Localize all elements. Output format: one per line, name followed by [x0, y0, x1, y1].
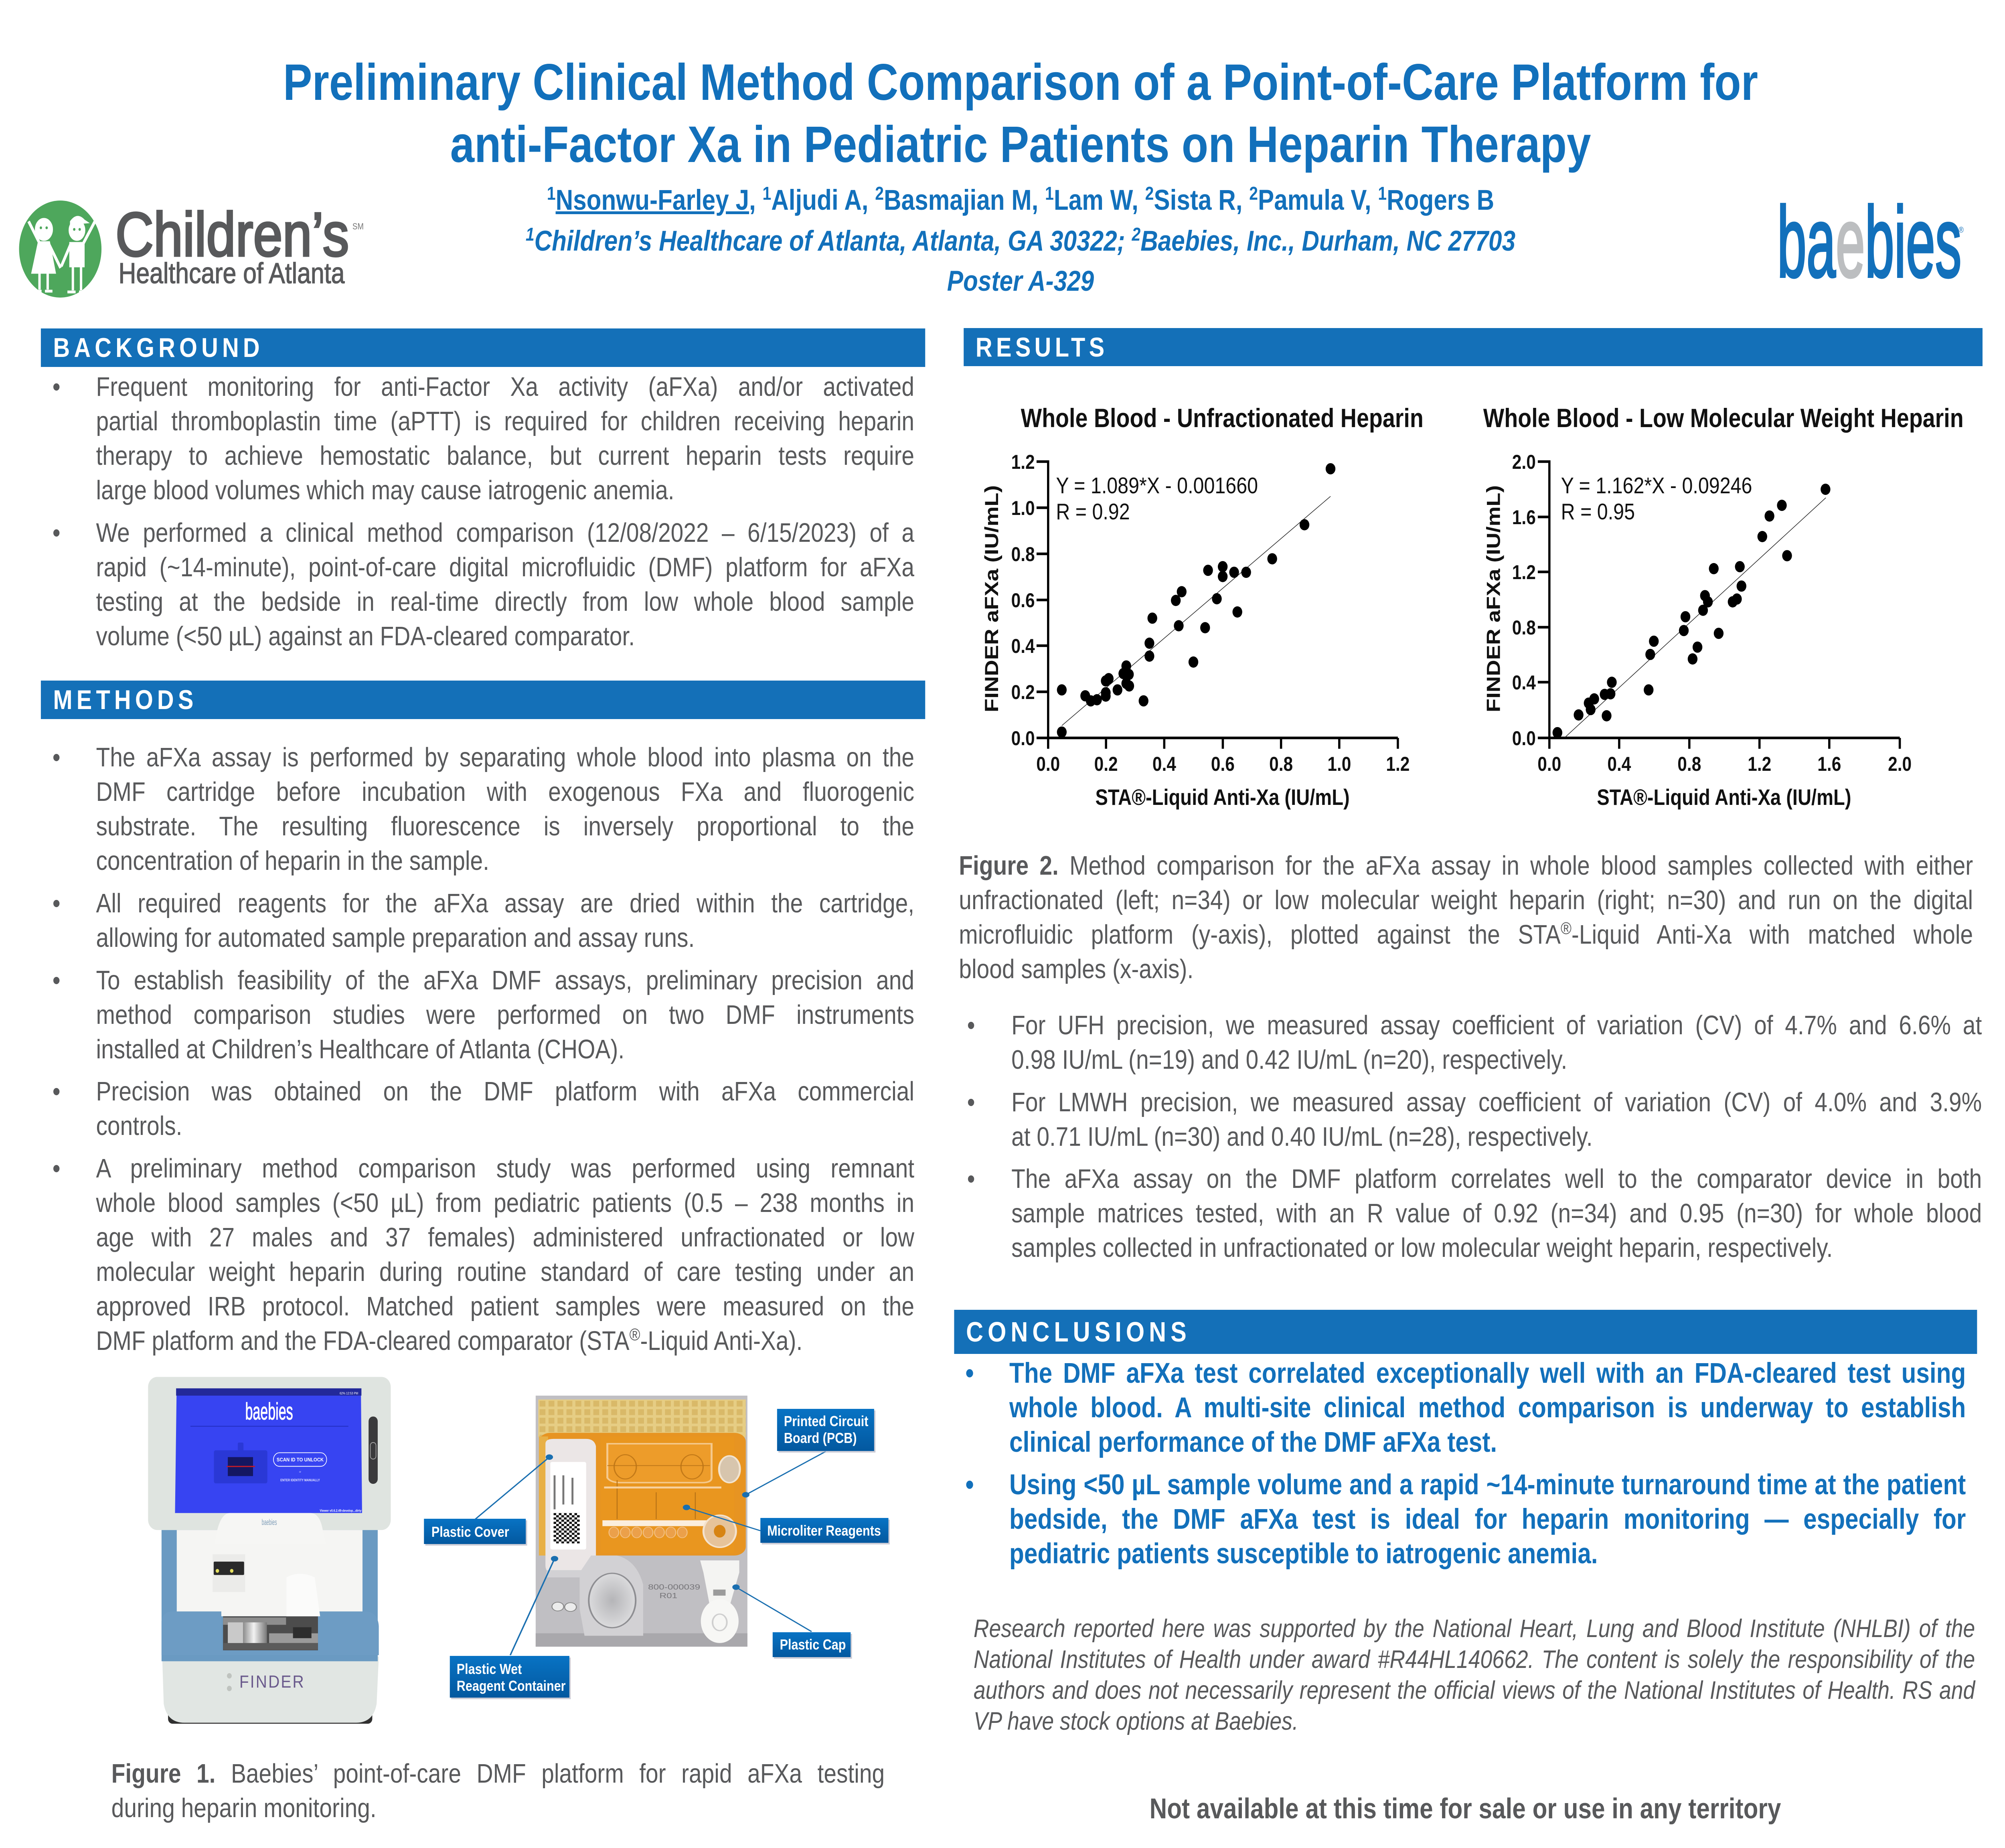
text: methods bullet 4: Precision was obtained on the DMF platform with aFXa commercial	[96, 1076, 914, 1106]
logo wordmark: Children’s	[115, 200, 349, 269]
text: background bullet 1: partial thromboplastin time (aPTT) is required for children receiving heparin	[96, 406, 914, 436]
text: methods bullet 2: allowing for automated sample preparation and assay runs.	[96, 923, 695, 953]
callout: plastic wet reagent container: Reagent Container	[457, 1678, 566, 1694]
poster: •	[53, 518, 61, 548]
text: methods bullet 5: approved IRB protocol. Matched patient samples were measured on the	[96, 1291, 914, 1321]
text: methods bullet 5: A preliminary method comparison study was performed using remnant	[96, 1153, 914, 1183]
funding statement	[974, 1613, 1975, 1737]
poster number: Poster A-329	[947, 265, 1094, 297]
device badge: baebies	[262, 1518, 277, 1527]
heading: conclusions: CONCLUSIONS	[966, 1316, 1191, 1348]
pointer lines	[476, 1451, 826, 1655]
cartridge part number: 800-000039	[648, 1583, 700, 1591]
text: background bullet 2: testing at the bedside in real-time directly from low whole blood sample	[96, 587, 914, 617]
screen version: Viewer v0.6.2.49-develop...dirty	[320, 1509, 362, 1513]
chart: whole blood unfractionated heparin	[981, 403, 1424, 810]
x axis tick labels: 0.0	[1036, 753, 1060, 775]
text: methods bullet 1: The aFXa assay is performed by separating whole blood into plasma on the	[96, 742, 914, 772]
text: results bullet 1: 0.98 IU/mL (n=19) and 0.42 IU/mL (n=20), respectively.	[1011, 1045, 1567, 1075]
y axis title: FINDER aFXa (IU/mL)	[981, 485, 1002, 712]
logo: Children's Healthcare of Atlanta	[19, 200, 364, 298]
poster: •	[53, 742, 61, 772]
text: conclusions bullet 2: Using <50 µL sample volume and a rapid ~14-minute turnaround time at the patient	[1009, 1469, 1966, 1501]
screen option: or	[299, 1471, 302, 1473]
text: conclusions bullet 1: whole blood. A multi-site clinical method comparison is underway to establish	[1009, 1392, 1966, 1424]
text: methods bullet 1: concentration of heparin in the sample.	[96, 846, 489, 876]
regression equation: Y = 1.162*X - 0.09246	[1561, 473, 1752, 498]
text: background bullet 1: large blood volumes which may cause iatrogenic anemia.	[96, 475, 674, 505]
y axis tick labels: 1.0	[1011, 497, 1035, 519]
text: conclusions bullet 2: pediatric patients susceptible to iatrogenic anemia.	[1009, 1538, 1598, 1570]
text: results bullet 3: sample matrices tested, with an R value of 0.92 (n=34) and 0.95 (n=30) for whole blood	[1011, 1198, 1982, 1228]
logo subtitle: Healthcare of Atlanta	[119, 257, 345, 290]
service mark: SM	[352, 221, 364, 231]
text: background bullet 2: We performed a clinical method comparison (12/08/2022 – 6/15/2023) of a	[96, 518, 914, 548]
text: conclusions bullet 2	[1009, 1468, 1966, 1571]
y axis tick labels: 0.4	[1011, 635, 1035, 657]
y axis tick labels: 0.6	[1011, 589, 1035, 612]
heading: results	[964, 328, 1983, 366]
text: methods bullet 3: method comparison studies were performed on two DMF instruments	[96, 1000, 914, 1030]
chart: whole blood low molecular weight heparin	[1482, 403, 1964, 810]
correlation: R = 0.95	[1561, 499, 1635, 525]
funding statement: Research reported here was supported by the National Heart, Lung and Blood Institute (NHLBI) of the	[974, 1615, 1975, 1643]
funding statement: National Institutes of Health under award #R44HL140662. The content is solely the responsibility of the	[974, 1645, 1975, 1674]
callout: plastic cover	[424, 1519, 527, 1546]
text: background bullet 1	[96, 370, 914, 508]
text: results bullet 3: samples collected in unfractionated or low molecular weight heparin, respectively.	[1011, 1233, 1833, 1263]
heading: background	[41, 328, 925, 367]
y axis tick labels: 2.0	[1512, 451, 1536, 473]
figure 1 caption: during heparin monitoring.	[111, 1793, 377, 1823]
regression equation: Y = 1.089*X - 0.001660	[1056, 473, 1258, 498]
axes	[1037, 462, 1398, 749]
x axis tick labels: 0.6	[1211, 753, 1235, 775]
text: background bullet 1: therapy to achieve hemostatic balance, but current heparin tests require	[96, 441, 914, 471]
text: methods bullet 3: To establish feasibility of the aFXa DMF assays, preliminary precision and	[96, 965, 914, 995]
chart title: Whole Blood - Low Molecular Weight Heparin	[1483, 403, 1964, 433]
screen manual entry: ENTER IDENTITY MANUALLY	[280, 1478, 320, 1482]
disclaimer: Not available at this time for sale or use in any territory	[1150, 1793, 1781, 1825]
text: methods bullet 5	[96, 1151, 914, 1358]
poster: •	[53, 1076, 61, 1106]
heading: conclusions	[954, 1310, 1977, 1354]
text: methods bullet 3	[96, 963, 914, 1067]
callout: microliter reagents	[760, 1518, 890, 1544]
logo: baebies	[1777, 186, 1964, 298]
cartridge revision: R01	[660, 1592, 677, 1600]
text: results bullet 2: at 0.71 IU/mL (n=30) and 0.40 IU/mL (n=28), respectively.	[1011, 1122, 1593, 1152]
authors: 1Nsonwu-Farley J, 1Aljudi A, 2Basmajian M, 1Lam W, 2Sista R, 2Pamula V, 1Rogers B	[547, 183, 1494, 216]
callout: plastic cap: Plastic Cap	[780, 1636, 846, 1653]
callout: plastic cap	[773, 1632, 852, 1659]
text: methods bullet 3: installed at Children’s Healthcare of Atlanta (CHOA).	[96, 1034, 624, 1064]
y axis title: FINDER aFXa (IU/mL)	[1482, 485, 1504, 712]
x axis tick labels: 0.0	[1537, 753, 1561, 775]
y axis tick labels: 0.8	[1512, 616, 1536, 639]
heading: results: RESULTS	[976, 332, 1108, 363]
title	[36, 51, 2005, 176]
x axis tick labels	[1537, 753, 1912, 775]
poster: •	[965, 1358, 974, 1389]
title: Preliminary Clinical Method Comparison of a Point-of-Care Platform for	[283, 54, 1758, 111]
x axis tick labels: 0.8	[1677, 753, 1701, 775]
text: background bullet 2: rapid (~14-minute), point-of-care digital microfluidic (DMF) platform for aFXa	[96, 552, 914, 582]
callout: plastic cover: Plastic Cover	[431, 1524, 509, 1540]
figure 1 caption: Figure 1. Baebies’ point-of-care DMF platform for rapid aFXa testing	[111, 1759, 885, 1789]
text: methods bullet 5: DMF platform and the FDA-cleared comparator (STA®-Liquid Anti-Xa).	[96, 1325, 802, 1356]
scatter points and fit line	[1057, 463, 1335, 738]
text: results bullet 2: For LMWH precision, we measured assay coefficient of variation (CV) of 4.0% and 3.9%	[1011, 1087, 1982, 1117]
text: methods bullet 5: age with 27 males and 37 females) administered unfractionated or low	[96, 1222, 914, 1252]
x axis tick labels: 1.6	[1817, 753, 1841, 775]
screen status: 62% 12:53 PM	[340, 1392, 358, 1395]
x axis tick labels: 0.2	[1094, 753, 1118, 775]
y axis tick labels	[1512, 451, 1536, 750]
text: results bullet 3: The aFXa assay on the DMF platform correlates well to the comparator device in both	[1011, 1164, 1982, 1194]
x axis title: STA®-Liquid Anti-Xa (IU/mL)	[1095, 785, 1350, 810]
x axis tick labels: 1.2	[1748, 753, 1771, 775]
text: methods bullet 1	[96, 740, 914, 878]
text: conclusions bullet 2: bedside, the DMF aFXa test is ideal for heparin monitoring — especially for	[1009, 1504, 1966, 1535]
funding statement: authors and does not necessarily represent the official views of the National Institutes of Health. RS and	[974, 1676, 1975, 1704]
screen button: SCAN ID TO UNLOCK	[277, 1457, 324, 1463]
poster: •	[53, 1153, 61, 1183]
text: conclusions bullet 1: clinical performance of the DMF aFXa test.	[1009, 1427, 1497, 1458]
text: background bullet 2: volume (<50 µL) against an FDA-cleared comparator.	[96, 621, 635, 651]
text: results bullet 3	[1011, 1162, 1982, 1265]
figure 2 caption	[959, 849, 1973, 987]
x axis tick labels: 1.0	[1327, 753, 1351, 775]
x axis tick labels	[1036, 753, 1410, 775]
y axis tick labels: 0.4	[1512, 671, 1536, 694]
y axis tick labels: 1.2	[1512, 561, 1536, 584]
text: methods bullet 2: All required reagents for the aFXa assay are dried within the cartridge,	[96, 888, 914, 918]
poster: •	[967, 1010, 975, 1040]
correlation: R = 0.92	[1056, 499, 1130, 525]
text: background bullet 1: Frequent monitoring for anti-Factor Xa activity (aFXa) and/or activated	[96, 372, 914, 402]
poster: •	[967, 1164, 975, 1194]
figure 2 caption: unfractionated (left; n=34) or low molecular weight heparin (right; n=30) and run on the digital	[959, 885, 1973, 915]
y axis tick labels: 0.2	[1011, 681, 1035, 703]
text: results bullet 1	[1011, 1008, 1982, 1077]
heading: methods: METHODS	[53, 685, 198, 715]
callout: printed circuit board	[777, 1409, 875, 1453]
y axis tick labels: 0.8	[1011, 543, 1035, 565]
poster: •	[967, 1087, 975, 1117]
callout: printed circuit board: Printed Circuit	[784, 1413, 868, 1429]
callout: printed circuit board: Board (PCB)	[784, 1430, 857, 1446]
screen logo: baebies	[245, 1398, 293, 1424]
heading: methods	[41, 681, 925, 719]
figure 2 caption: Figure 2. Method comparison for the aFXa assay in whole blood samples collected with either	[959, 851, 1973, 881]
x axis tick labels: 2.0	[1888, 753, 1912, 775]
text: results bullet 1: For UFH precision, we measured assay coefficient of variation (CV) of 4.7% and 6.6% at	[1011, 1010, 1982, 1040]
text: background bullet 2	[96, 516, 914, 654]
callout: plastic wet reagent container: Plastic Wet	[457, 1661, 522, 1677]
illustration: cartridge	[476, 1396, 826, 1655]
y axis tick labels: 0.0	[1011, 727, 1035, 750]
chart title: Whole Blood - Unfractionated Heparin	[1021, 403, 1424, 433]
title: anti-Factor Xa in Pediatric Patients on Heparin Therapy	[450, 116, 1591, 173]
figure 2 caption: microfluidic platform (y-axis), plotted against the STA®-Liquid Anti-Xa with matched whole	[959, 919, 1973, 950]
x axis title: STA®-Liquid Anti-Xa (IU/mL)	[1597, 785, 1851, 810]
text: methods bullet 1: DMF cartridge before incubation with exogenous FXa and fluorogenic	[96, 777, 914, 807]
figure 1 caption	[111, 1757, 885, 1826]
poster: •	[53, 965, 61, 995]
text: methods bullet 4	[96, 1074, 914, 1143]
heading: background: BACKGROUND	[53, 332, 264, 363]
text: methods bullet 5: whole blood samples (<50 µL) from pediatric patients (0.5 – 238 months in	[96, 1188, 914, 1218]
funding statement: VP have stock options at Baebies.	[974, 1707, 1298, 1735]
x axis tick labels: 0.4	[1607, 753, 1631, 775]
text: results bullet 2	[1011, 1085, 1982, 1154]
callout: microliter reagents: Microliter Reagents	[767, 1522, 881, 1539]
device name: FINDER	[239, 1672, 304, 1692]
text: methods bullet 1: substrate. The resulting fluorescence is inversely proportional to the	[96, 811, 914, 841]
text: methods bullet 4: controls.	[96, 1111, 182, 1141]
text: conclusions bullet 1	[1009, 1356, 1966, 1460]
poster: •	[53, 372, 61, 402]
logo wordmark: baebies	[1777, 186, 1961, 298]
poster: •	[965, 1469, 974, 1501]
x axis tick labels: 0.4	[1152, 753, 1176, 775]
text: methods bullet 5: molecular weight heparin during routine standard of care testing under an	[96, 1257, 914, 1287]
y axis tick labels: 1.2	[1011, 451, 1035, 473]
text: methods bullet 2	[96, 886, 914, 955]
figure 2 caption: blood samples (x-axis).	[959, 954, 1193, 984]
icon: two children in green circle	[19, 201, 101, 298]
y axis tick labels: 1.6	[1512, 506, 1536, 529]
scatter points and fit line	[1553, 484, 1831, 738]
text: conclusions bullet 1: The DMF aFXa test correlated exceptionally well with an FDA-cleared test using	[1009, 1358, 1966, 1389]
callout: plastic wet reagent container	[450, 1656, 571, 1699]
affiliations: 1Children’s Healthcare of Atlanta, Atlanta, GA 30322; 2Baebies, Inc., Durham, NC 27703	[526, 224, 1515, 257]
y axis tick labels: 0.0	[1512, 727, 1536, 750]
axes	[1538, 462, 1900, 749]
illustration: FINDER device	[148, 1377, 391, 1724]
poster: •	[53, 888, 61, 918]
x axis tick labels: 0.8	[1269, 753, 1293, 775]
y axis tick labels	[1011, 451, 1035, 750]
x axis tick labels: 1.2	[1386, 753, 1410, 775]
registered mark: ®	[1959, 226, 1964, 235]
